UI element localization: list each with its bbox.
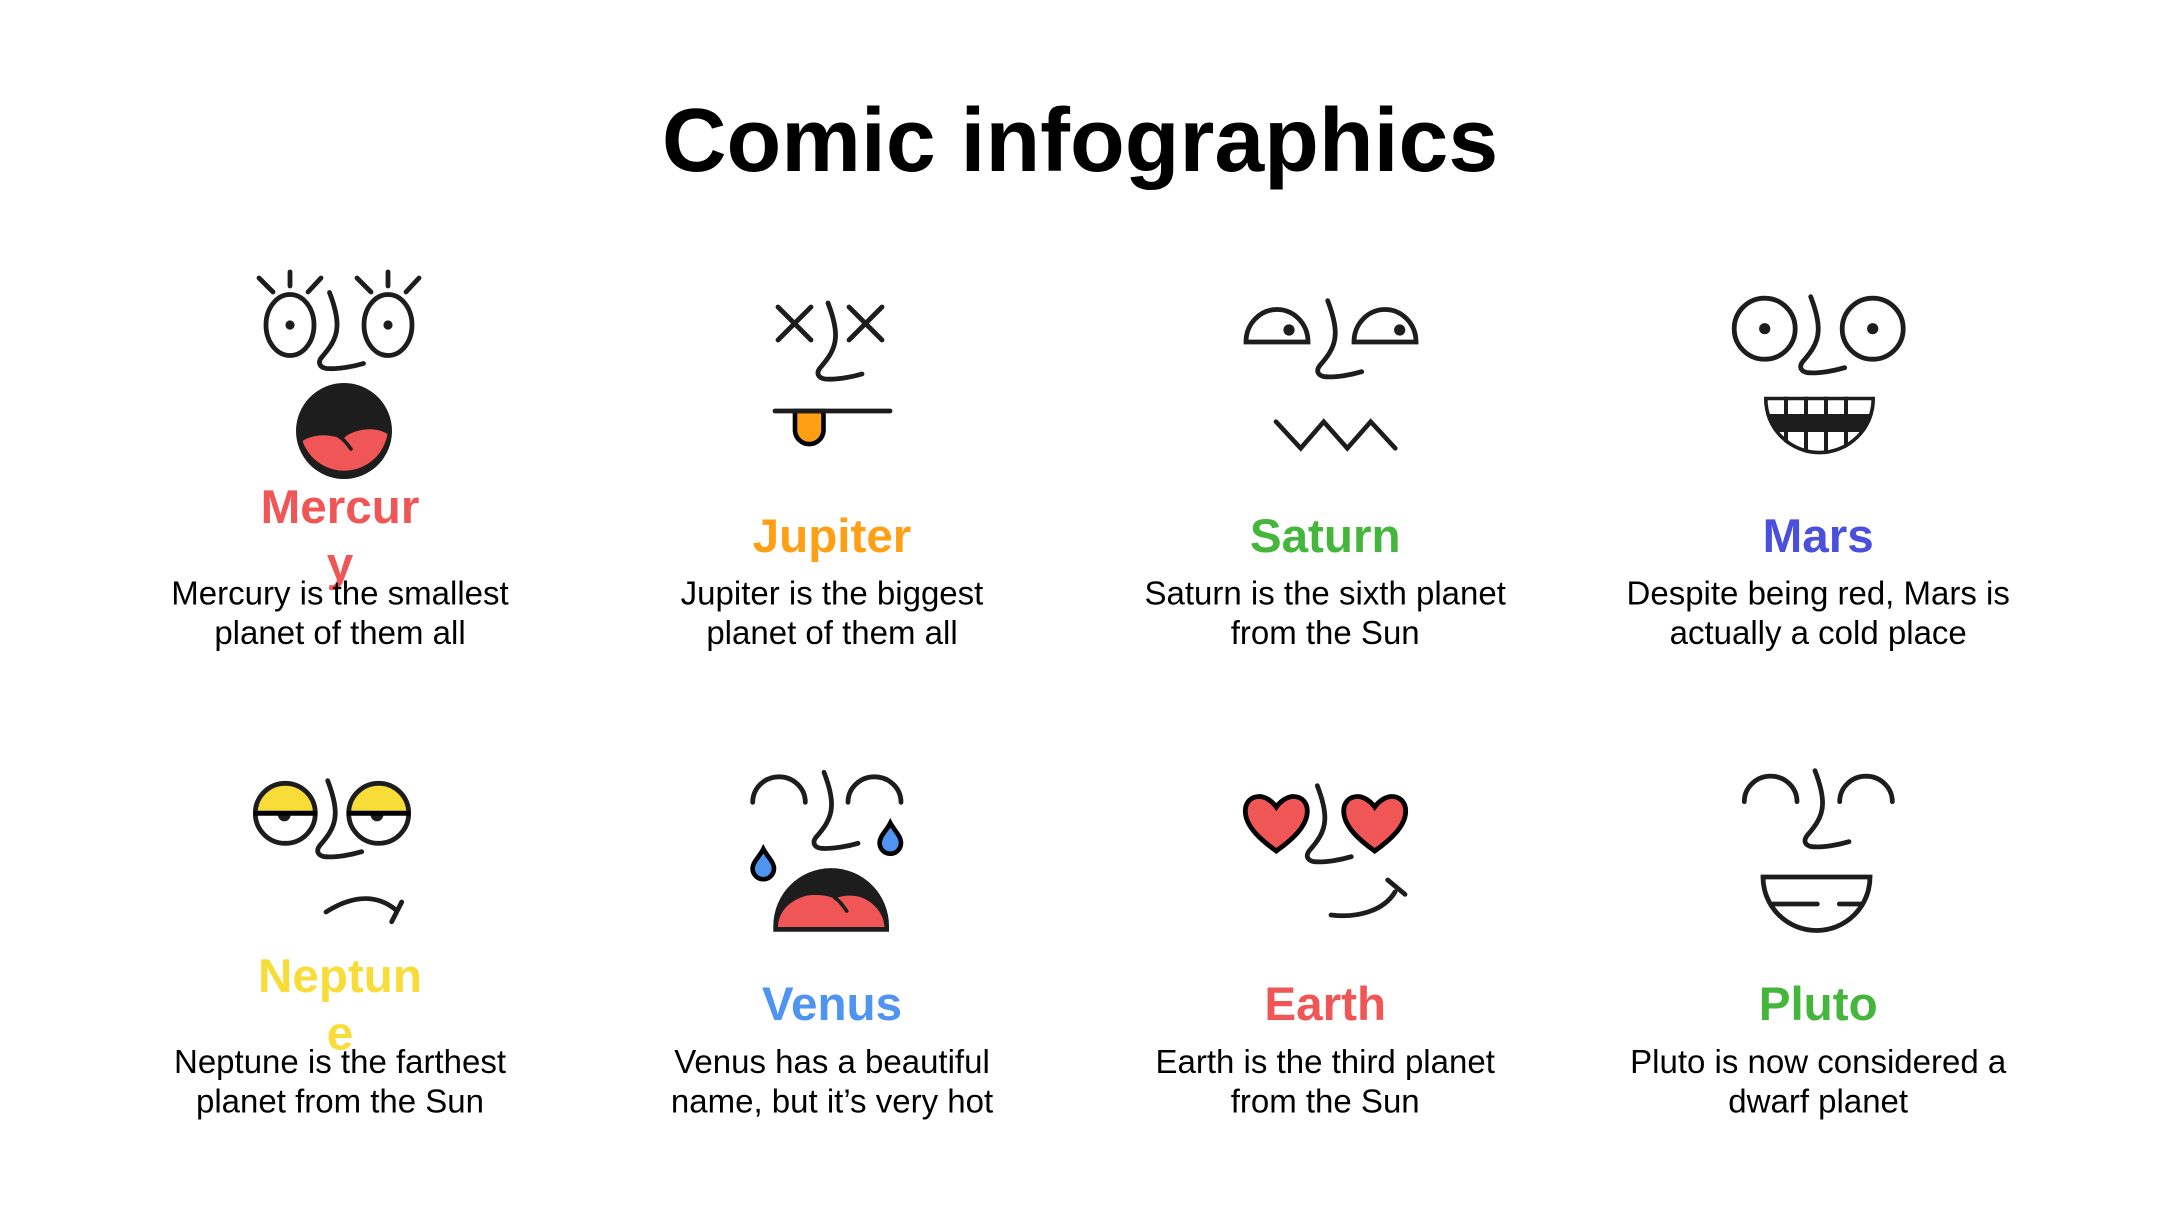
panel: Neptune (174, 781, 506, 1120)
description: Earth: Earth is the third planet (1156, 1043, 1495, 1080)
description: Mercury: Mercury is the smallest (171, 574, 509, 612)
description: Venus (671, 1043, 993, 1120)
description: Jupiter: Jupiter is the biggest (681, 574, 983, 612)
panel: Mercury (171, 272, 509, 651)
description: Saturn: from the Sun (1231, 614, 1420, 651)
closed eyes (753, 777, 901, 802)
open mouth with tongue (296, 383, 392, 479)
grinning mouth with teeth (1764, 396, 1875, 454)
mouth line (775, 409, 890, 413)
closed eyes (1744, 776, 1892, 802)
panel: Pluto (1630, 771, 2007, 1120)
heading: Mercury: Mercur (261, 481, 419, 534)
left eye (1246, 310, 1308, 342)
open mouth with tongue (773, 868, 889, 932)
right eye (347, 783, 410, 843)
panel: Mars (1627, 297, 2010, 651)
left tear (753, 849, 774, 879)
heading: Mars: Mars (1763, 510, 1874, 563)
smiling mouth (1763, 877, 1870, 930)
right eye with lashes (357, 272, 419, 356)
right tear (880, 823, 901, 854)
right eye (1354, 310, 1416, 342)
description: Jupiter (681, 574, 983, 651)
description: Mars (1627, 574, 2010, 651)
right heart eye (1344, 796, 1406, 851)
heading: Earth: Earth (1264, 978, 1386, 1031)
description: Neptune (174, 1043, 506, 1120)
zigzag mouth (1276, 422, 1395, 448)
tongue (795, 411, 824, 444)
heading: Neptune: e (327, 1008, 353, 1060)
heading: Jupiter: Jupiter (753, 510, 911, 563)
description: Mars: Despite being red, Mars is (1627, 574, 2010, 612)
left heart eye (1245, 796, 1307, 851)
icon: Earth in-love face (1245, 786, 1406, 916)
nose (1801, 297, 1845, 373)
heading: Pluto: Pluto (1759, 978, 1878, 1031)
nose (1318, 301, 1362, 377)
nose (814, 772, 858, 848)
description: Pluto (1630, 1043, 2007, 1120)
icon: Pluto laughing face (1744, 771, 1892, 930)
nose (318, 781, 362, 857)
nose (818, 303, 862, 379)
panel: Earth (1156, 786, 1495, 1120)
crossed eyes (778, 307, 882, 340)
right eye (1842, 298, 1903, 359)
description: Neptune: Neptune is the farthest (174, 1043, 506, 1080)
description: Saturn (1145, 574, 1506, 651)
panel: Saturn (1145, 301, 1506, 651)
icon: Mercury surprised face (259, 272, 419, 479)
description: Pluto: dwarf planet (1728, 1082, 1908, 1120)
description: Jupiter: planet of them all (706, 614, 958, 651)
title: Comic infographics (662, 90, 1498, 190)
smile (1331, 880, 1405, 916)
nose (1307, 786, 1351, 862)
panel: Venus (671, 772, 993, 1120)
description: Saturn: Saturn is the sixth planet (1145, 574, 1506, 612)
icon: Venus crying face (753, 772, 901, 932)
nose (319, 292, 364, 369)
description: Neptune: planet from the Sun (196, 1082, 484, 1120)
heading: Neptune (258, 950, 422, 1060)
icon: Jupiter dizzy face (775, 303, 890, 444)
heading: Neptune: Neptun (258, 950, 422, 1003)
heading: Mercury: y (327, 538, 354, 591)
heading: Saturn: Saturn (1250, 510, 1401, 563)
left eye with lashes (259, 272, 321, 356)
description: Mercury (171, 574, 509, 651)
icon: Mars grinning face (1734, 297, 1903, 456)
description: Pluto: Pluto is now considered a (1630, 1043, 2007, 1080)
description: Earth (1156, 1043, 1495, 1120)
icon: Saturn side-eye face (1246, 301, 1416, 448)
left eye (1734, 298, 1795, 359)
left eye (254, 783, 317, 843)
nose (1805, 771, 1849, 847)
frown mouth (326, 899, 402, 922)
description: Mercury: planet of them all (214, 614, 466, 651)
panel: Jupiter (681, 303, 983, 651)
heading: Venus: Venus (762, 978, 902, 1031)
heading: Mercury (261, 481, 419, 591)
description: Venus: Venus has a beautiful (674, 1043, 990, 1080)
description: Earth: from the Sun (1231, 1082, 1420, 1120)
icon: Neptune sleepy face (254, 781, 410, 922)
description: Mars: actually a cold place (1670, 614, 1967, 651)
description: Venus: name, but it’s very hot (671, 1082, 993, 1120)
